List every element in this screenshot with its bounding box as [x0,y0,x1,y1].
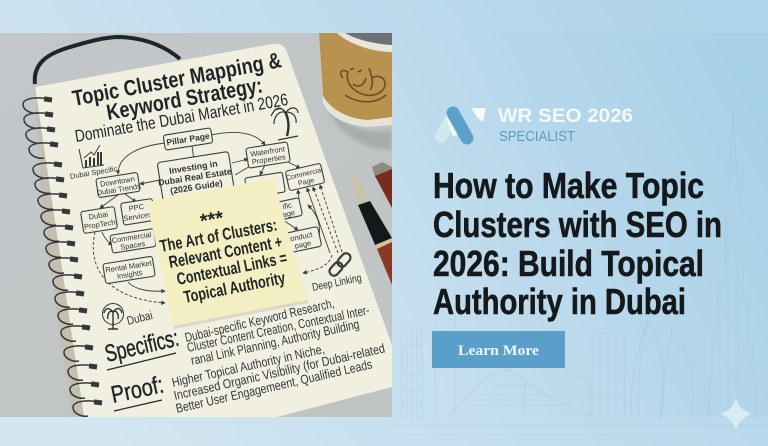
node: Investing in Dubai Real Estate: Investing in [168,158,218,176]
button: Learn More [432,331,565,368]
node: Waterfront Properties: Properties [251,152,287,167]
node: Rental Market Insights: Rental Market [105,258,153,275]
node: Investing in Dubai Real Estate: (2026 Guide) [170,178,223,196]
node: PPC Services [120,198,156,225]
node: PPC Services: PPC [128,202,145,213]
icon: chain link [328,251,352,278]
node: PPC Services: Services [123,210,153,223]
node: partial Product page: onduct [289,230,314,243]
node: partial Traffic page: ific [282,200,293,211]
headline: 2026: Build Topical [433,243,704,284]
cup calligraphy [341,68,386,102]
spiral binding [23,96,102,416]
specifics block: Specifics: [102,325,181,368]
logo white triangle [472,108,486,122]
icon: palm tree [271,108,298,140]
node: Commercial Spaces: Commercial [111,230,152,245]
cup white base [319,33,392,127]
pen two body [375,169,392,208]
logo blue capsule [453,113,467,138]
node: Investing in Dubai Real Estate: Dubai Real Estate [157,166,232,188]
node: partial hidden box [245,172,285,198]
node: Pillar Page: Pillar Page [166,131,211,147]
pens [350,162,392,285]
node: Waterfront Properties: Waterfront [250,144,286,159]
label: Dubai: Dubai [125,308,154,328]
sticky note: Relevant Content + [167,232,284,272]
node: Commercial Page: Page [297,177,315,188]
decorative skyline [392,113,768,435]
notebook title: Keyword Strategy: [104,72,264,125]
sticky note: Contextual Links = [175,248,289,289]
specifics block: ranal Link Planning, Authority Building [189,316,361,368]
specifics block [102,295,371,370]
proof block: Better User Engagemeent, Qualified Leads [174,356,374,416]
button: Learn More: Learn More [458,343,539,359]
logo mint capsule [441,118,451,137]
specifics block: Dubai-specific Keyword Research, [183,295,336,345]
node: Downtown Dubai Trends: Dubai Trends [96,181,142,197]
node: Waterfront Properties [246,142,290,168]
cluster map [80,128,342,303]
node: Rental Market Insights: Insights [116,268,143,281]
node: Commercial Spaces [110,229,156,253]
node: Dubai PropTech: PropTech [83,218,116,231]
pen one body [358,201,392,247]
label: Dubai Specific: Dubai Specific [69,164,118,181]
label: Deep Linking: Deep Linking [311,272,363,294]
proof block: Proof: [109,371,166,409]
headline: Authority in Dubai [433,281,686,322]
node: Pillar Page [163,128,213,150]
page edge [35,87,84,417]
pen one ring [375,238,392,249]
panel: right background [392,33,768,417]
headline [433,165,722,322]
sticky note: Topical Authority [182,268,287,307]
icon: sparkle [722,400,750,428]
logo pale capsule [427,113,440,137]
proof block [109,340,386,416]
pen one nib [350,173,370,204]
coffee cup [319,33,392,150]
node: partial Traffic page [280,198,303,220]
cup rim [337,33,392,52]
elastic band [35,37,180,84]
headline: How to Make Topic [433,165,704,206]
logo wordmark: WR SEO 2026 [498,106,633,127]
node: Commercial Page: Commercial [285,167,324,182]
pen two cap [372,162,392,177]
node: partial Product page [288,226,322,252]
node: Dubai PropTech [80,206,118,234]
icon: growth chart [79,145,104,168]
node: Downtown Dubai Trends: Downtown [99,174,135,189]
notebook title: Topic Cluster Mapping & [70,47,283,111]
specifics block: Cluster Content Creation, Contextual Inter- [186,302,371,355]
notebook title [71,53,288,142]
icon: Dubai palm emblem [102,304,124,329]
node: Dubai PropTech: Dubai [88,210,109,222]
logo subtitle: SPECIALIST [499,129,575,145]
node: Rental Market Insights [103,256,155,284]
proof block: Increased Organic Visibility (for Dubai-related [172,340,386,403]
proof block: Higher Topical Authority in Niche, [170,341,326,390]
cup shadow [327,110,392,151]
arrows [93,132,342,303]
sticky note: The Art of Clusters: [158,215,279,256]
notebook title: Dominate the Dubai Market in 2026 [73,90,289,146]
node: Commercial Spaces: Spaces [120,239,146,252]
sticky note: *** [199,207,226,233]
node: Commercial Page [285,163,326,191]
node: Downtown Dubai Trends [94,172,142,198]
notebook page [35,44,392,417]
logo white notch [446,115,458,137]
cup interior [345,33,392,45]
logo [427,106,633,145]
node: partial Product page: page [294,238,312,251]
node: Investing in Dubai Real Estate [157,151,234,199]
panel: notebook photo [0,33,392,417]
node: partial Traffic page: age [282,208,296,219]
pen one barrel [377,242,392,285]
cup tan sleeve [319,33,392,120]
sticky note [147,178,308,329]
